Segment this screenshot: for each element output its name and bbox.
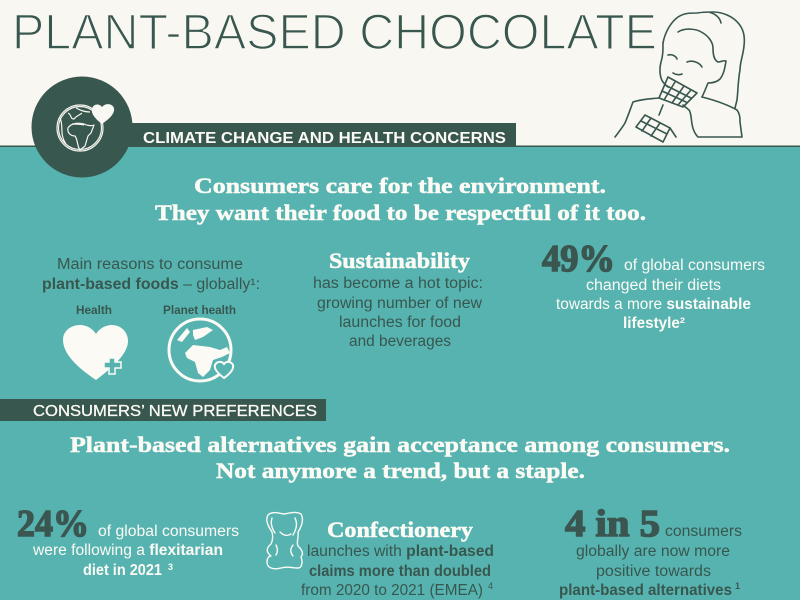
text: sustainability: Sustainability <box>329 248 470 273</box>
text: main reasons <box>42 256 260 293</box>
text: main reasons: Main reasons to consume <box>57 256 243 273</box>
text: confectionery: launches with plant-based <box>307 543 494 560</box>
illustration: girl eating chocolate <box>615 12 744 142</box>
stat: 4 in 5: globally are now more <box>576 543 730 560</box>
text: sustainability: growing number of new <box>317 295 483 312</box>
text: sustainability: has become a hot topic: <box>313 275 483 292</box>
stat: 49%: changed their diets <box>586 277 721 294</box>
section title: CLIMATE CHANGE AND HEALTH CONCERNS <box>143 130 506 147</box>
text: sustainability: launches for food <box>339 314 461 331</box>
headline: plant-based alternatives: Not anymore a trend, but a staple. <box>216 458 585 483</box>
stat: 4 in 5: plant-based alternatives <box>559 582 732 599</box>
icon: globe with heart <box>57 105 103 151</box>
text: sustainability <box>313 248 483 350</box>
headline: plant-based alternatives: Plant-based alternatives gain acceptance among consumers. <box>70 432 730 457</box>
stat: 24%: of global consumers <box>98 523 239 540</box>
section banner: climate change <box>32 76 516 178</box>
teal background panel <box>0 146 800 600</box>
stat: 24%: diet in 2021 <box>83 562 162 579</box>
icon: planet health globe <box>163 303 236 381</box>
headline: consumers care: Consumers care for the environment. <box>194 173 606 198</box>
stat: 4 in 5: 4 in 5 <box>565 503 660 545</box>
stat: 49%: lifestyle² <box>623 315 685 332</box>
text: confectionery: 4 <box>488 581 493 591</box>
headline: consumers care: They want their food to be respectful of it too. <box>155 200 646 225</box>
section banner: consumers' new preferences <box>0 399 326 421</box>
text: confectionery: from 2020 to 2021 (EMEA) <box>301 582 483 599</box>
section banner: consumers' new preferences: CONSUMERS’ NEW PREFERENCES <box>33 403 317 420</box>
icon: health heart <box>63 303 128 380</box>
stat: 4 in 5: positive towards <box>596 563 711 580</box>
stat: 49%: of global consumers <box>624 257 765 274</box>
headline: consumers care <box>155 173 646 225</box>
text: main reasons: plant-based foods – globally¹: <box>42 276 260 293</box>
stat: 4 in 5: 1 <box>735 581 740 591</box>
text: confectionery: claims more than doubled <box>309 563 491 580</box>
stat: 24% <box>17 503 239 579</box>
stat: 24%: 3 <box>168 562 173 572</box>
stat: 4 in 5 <box>559 503 742 599</box>
stat: 49%: 49% <box>542 238 615 280</box>
text: confectionery <box>301 517 494 599</box>
stat: 49% <box>542 238 765 332</box>
stat: 24%: were following a flexitarian <box>32 542 223 559</box>
text: confectionery: Confectionery <box>327 517 473 542</box>
icon: gummy bear <box>267 512 302 569</box>
text: sustainability: and beverages <box>349 333 451 350</box>
stat: 49%: towards a more sustainable <box>556 296 751 313</box>
title: PLANT-BASED CHOCOLATE <box>12 4 657 60</box>
headline: plant-based alternatives <box>70 432 730 483</box>
stat: 4 in 5: consumers <box>665 523 742 540</box>
stat: 24%: 24% <box>17 503 89 545</box>
icon: health heart: Health <box>76 303 112 317</box>
icon: planet health globe: Planet health <box>163 303 236 317</box>
